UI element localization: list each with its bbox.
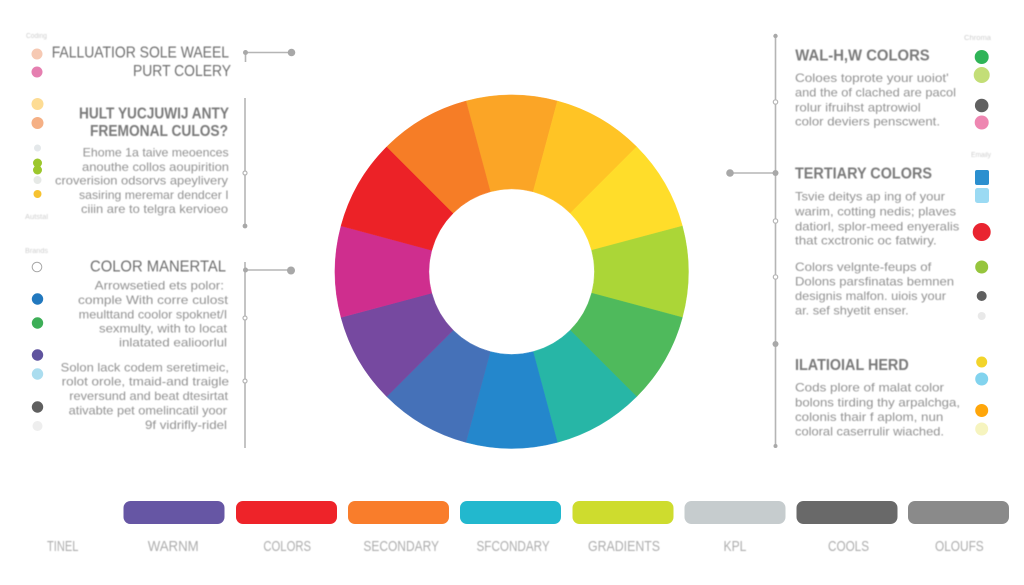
heading: WAL-H,W COLORS xyxy=(795,48,930,64)
body text xyxy=(795,71,956,129)
body text: sasiring meremar dendcer I xyxy=(79,188,229,202)
bottom labels: COLORS xyxy=(263,539,311,555)
bottom labels xyxy=(47,539,984,555)
body text: and the of clached are pacol xyxy=(795,85,956,99)
body text: coloral caserrulir wiached. xyxy=(795,424,944,438)
bottom labels: WARNM xyxy=(148,539,199,555)
body text: bolons tirding thy arpalchga, xyxy=(795,395,960,409)
body text: rolur ifruihst aptrowiol xyxy=(795,100,921,114)
panel: left question block xyxy=(55,106,230,216)
tiny label: brands: Brands xyxy=(25,248,49,255)
body text two: reversund and beat dtesirtat xyxy=(69,389,229,403)
tiny label: autstal: Autstal xyxy=(25,214,48,221)
body text two: designis malfon. uiois your xyxy=(795,289,946,303)
body text: croverision odsorvs apeylivery xyxy=(55,174,228,188)
heading: TERTIARY COLORS xyxy=(795,166,932,182)
bottom labels: OLOUFS xyxy=(935,539,984,555)
color wheel xyxy=(335,95,688,448)
left connector lines xyxy=(243,49,295,448)
body text one: datiorl, splor-meed enyeralis xyxy=(795,219,959,233)
body text two: 9f vidrifly-ridel xyxy=(145,418,227,432)
heading: ILATIOIAL HERD xyxy=(795,357,909,374)
right connector lines xyxy=(726,34,778,448)
tiny label: chroma: Chroma xyxy=(964,35,991,42)
bottom labels: SFCONDARY xyxy=(476,539,550,555)
bottom labels: COOLS xyxy=(828,539,869,555)
body text: color deviers penscwent. xyxy=(795,115,940,129)
bottom labels: KPL xyxy=(724,539,746,555)
body text two: rolot orole, tmaid-and traigle xyxy=(62,374,229,388)
heading xyxy=(79,106,230,140)
body text xyxy=(795,381,960,438)
body text two xyxy=(795,260,954,318)
body text one: inlatated ealioorlul xyxy=(119,335,227,349)
body text one: warim, cotting nedis; plaves xyxy=(794,205,956,219)
body text: Coloes toprote your uoiot' xyxy=(795,71,949,85)
panel: left top heading: PURT COLERY xyxy=(133,63,231,80)
body text one: Arrowsetied ets polor: xyxy=(95,278,224,292)
body text one: sexmulty, with to locat xyxy=(99,321,228,335)
body text one xyxy=(78,278,229,349)
body text two: ativabte pet omelincatil yoor xyxy=(69,403,227,417)
panel: left top heading xyxy=(52,44,231,80)
body text one: Tsvie deitys ap ing of your xyxy=(795,190,945,204)
body text: Cods plore of malat color xyxy=(795,381,944,395)
heading: HULT YUCJUWIJ ANTY xyxy=(79,106,230,122)
panel: bottom right block xyxy=(795,357,960,438)
body text one: meulttand coolor spoknet/I xyxy=(79,307,227,321)
body text one: comple With corre culost xyxy=(78,293,229,307)
panel: left top heading: FALLUATIOR SOLE WAEEL xyxy=(52,44,229,62)
body text two: Colors velgnte-feups of xyxy=(795,260,932,274)
tiny label: emaily: Emaily xyxy=(971,152,991,159)
right swatch column xyxy=(964,35,991,436)
body text two: Solon lack codem seretimeic, xyxy=(61,360,229,374)
heading: COLOR MANERTAL xyxy=(90,258,226,276)
panel: warm colors block xyxy=(795,48,956,129)
tiny label: coding: Coding xyxy=(26,33,47,40)
body text: colonis thair f aplom, nun xyxy=(795,410,943,424)
left swatch column xyxy=(25,33,49,431)
panel: left color material block xyxy=(61,258,229,432)
panel: tertiary colors block xyxy=(794,166,959,318)
bottom labels: TINEL xyxy=(47,539,78,555)
body text two: Dolons parsfinatas bemnen xyxy=(795,275,954,289)
bottom labels: SECONDARY xyxy=(363,539,439,555)
bottom labels: GRADIENTS xyxy=(588,539,660,555)
body text xyxy=(55,145,229,216)
body text: anouthe collos aoupirition xyxy=(82,160,229,174)
body text one: that cxctronic oc fatwiry. xyxy=(795,233,937,247)
body text one xyxy=(794,190,959,247)
bottom color bars xyxy=(124,501,1009,524)
body text two xyxy=(61,360,229,432)
heading: FREMONAL CULOS? xyxy=(90,123,228,140)
body text: ciiin are to telgra kervioeo xyxy=(81,202,228,216)
body text two: ar. sef shyetit enser. xyxy=(795,304,909,318)
body text: Ehome 1a taive meoences xyxy=(83,145,229,159)
